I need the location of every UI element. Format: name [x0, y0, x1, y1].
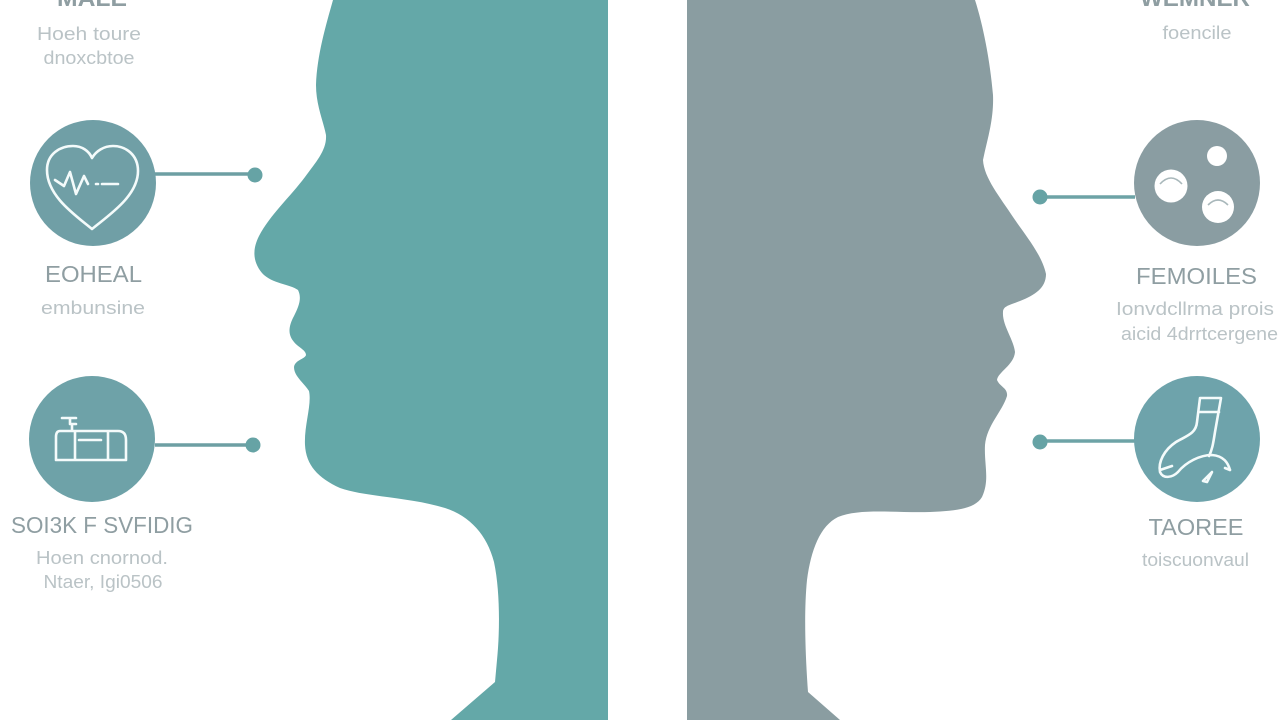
label: females: FEMOILES — [1136, 263, 1257, 289]
label: machine — [11, 512, 193, 592]
label: machine: SOI3K F SVFIDIG — [11, 512, 193, 538]
icon: machine — [29, 376, 155, 502]
connector: sock icon to face — [1032, 434, 1135, 450]
silhouette: male profile — [254, 0, 608, 720]
text: male description — [37, 23, 141, 68]
connector: cells icon to face — [1032, 190, 1135, 204]
label: heart: EOHEAL — [45, 261, 142, 287]
label: machine: Hoen cnornod. — [36, 547, 168, 568]
icon: sock — [1134, 376, 1260, 502]
label: heart: embunsine — [41, 297, 145, 318]
text: male description: Hoeh toure — [37, 23, 141, 44]
label: sock — [1142, 514, 1249, 570]
label: females — [1116, 263, 1278, 344]
icon: heart with pulse — [30, 120, 156, 246]
icon: cells — [1134, 120, 1260, 246]
connector: heart icon to face — [155, 168, 262, 182]
label: females: Ionvdcllrma prois — [1116, 298, 1274, 319]
label: females: aicid 4drrtcergene — [1121, 323, 1278, 344]
connector: machine icon to face — [155, 438, 260, 452]
label: heart — [41, 261, 145, 318]
label: sock: toiscuonvaul — [1142, 549, 1249, 570]
text: women description: foencile — [1162, 22, 1232, 43]
silhouette: female profile — [687, 0, 1046, 720]
label: sock: TAOREE — [1148, 514, 1244, 540]
label: machine: Ntaer, Igi0506 — [44, 571, 162, 592]
text: male description: dnoxcbtoe — [44, 47, 134, 68]
